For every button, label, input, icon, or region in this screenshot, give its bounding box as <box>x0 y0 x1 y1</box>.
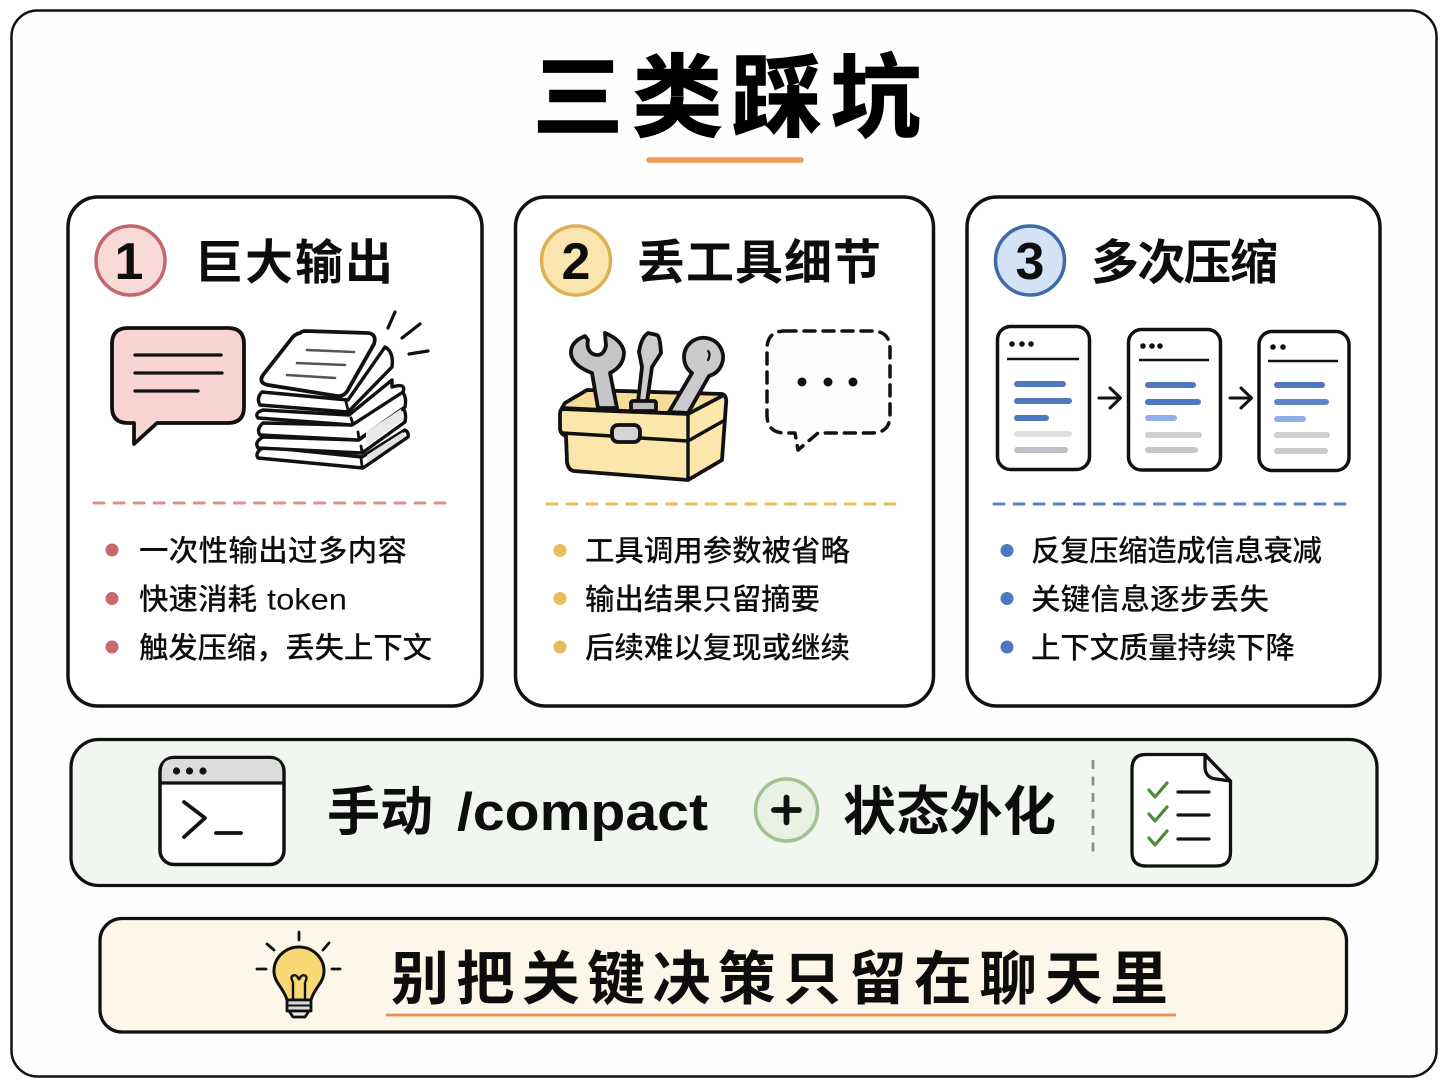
heading: 多次压缩 <box>1091 237 1278 290</box>
badge 3 <box>996 226 1064 295</box>
bullet list: token <box>267 584 347 616</box>
icon: speech bubble <box>112 328 244 444</box>
bullet list: 一次性输出过多内容 <box>139 535 407 568</box>
icon: light bulb <box>257 932 340 1017</box>
icon: document 3 <box>1259 332 1349 470</box>
icon: paper stack <box>257 312 428 468</box>
vertical dashed divider <box>1092 760 1094 859</box>
icon: dashed speech bubble <box>767 331 890 450</box>
divider <box>994 502 1345 506</box>
divider <box>547 502 895 506</box>
panel: 巨大输出 <box>68 197 482 706</box>
badge 2: 2 <box>562 233 590 291</box>
bullet list: 上下文质量持续下降 <box>1031 632 1295 665</box>
bullet list: 工具调用参数被省略 <box>585 535 850 568</box>
panel: 丢工具细节 <box>516 197 934 706</box>
bullet list: 输出结果只留摘要 <box>585 584 820 616</box>
icon: terminal window <box>160 758 284 864</box>
bullet list: 关键信息逐步丢失 <box>1031 584 1269 616</box>
icon: plus <box>756 779 818 841</box>
text: manual compact: 手动 <box>327 783 433 842</box>
heading: 巨大输出 <box>195 237 393 290</box>
icon: document 1 <box>998 326 1090 470</box>
divider <box>94 502 445 504</box>
heading: 丢工具细节 <box>637 237 881 290</box>
badge 1: 1 <box>115 233 143 291</box>
bullet list: 反复压缩造成信息衰减 <box>1031 535 1322 568</box>
icon: checklist document <box>1132 754 1230 866</box>
arrow <box>1099 388 1120 408</box>
text: externalize state: 状态外化 <box>843 783 1056 842</box>
title underline <box>649 157 801 163</box>
text: manual compact <box>327 783 708 842</box>
arrow <box>1230 388 1252 408</box>
bullet list <box>106 535 432 665</box>
bullet list: 快速消耗 <box>139 584 257 616</box>
banner: takeaway <box>100 918 1346 1032</box>
text: manual compact: /compact <box>457 783 708 842</box>
text: takeaway: 别把关键决策只留在聊天里 <box>391 947 1168 1012</box>
badge 1 <box>96 226 165 295</box>
takeaway underline <box>386 1014 1176 1016</box>
banner: solution <box>71 740 1377 886</box>
badge 2 <box>542 226 610 295</box>
title: 三类踩坑 <box>533 49 921 149</box>
bullet list: 触发压缩，丢失上下文 <box>139 632 432 665</box>
icon: toolbox with tools <box>560 333 726 480</box>
bullet list: 后续难以复现或继续 <box>585 632 850 665</box>
bullet list <box>1000 535 1322 665</box>
panel: 多次压缩 <box>967 197 1380 706</box>
icon: document 2 <box>1128 330 1220 470</box>
bullet list <box>554 535 850 665</box>
badge 3: 3 <box>1016 233 1044 291</box>
